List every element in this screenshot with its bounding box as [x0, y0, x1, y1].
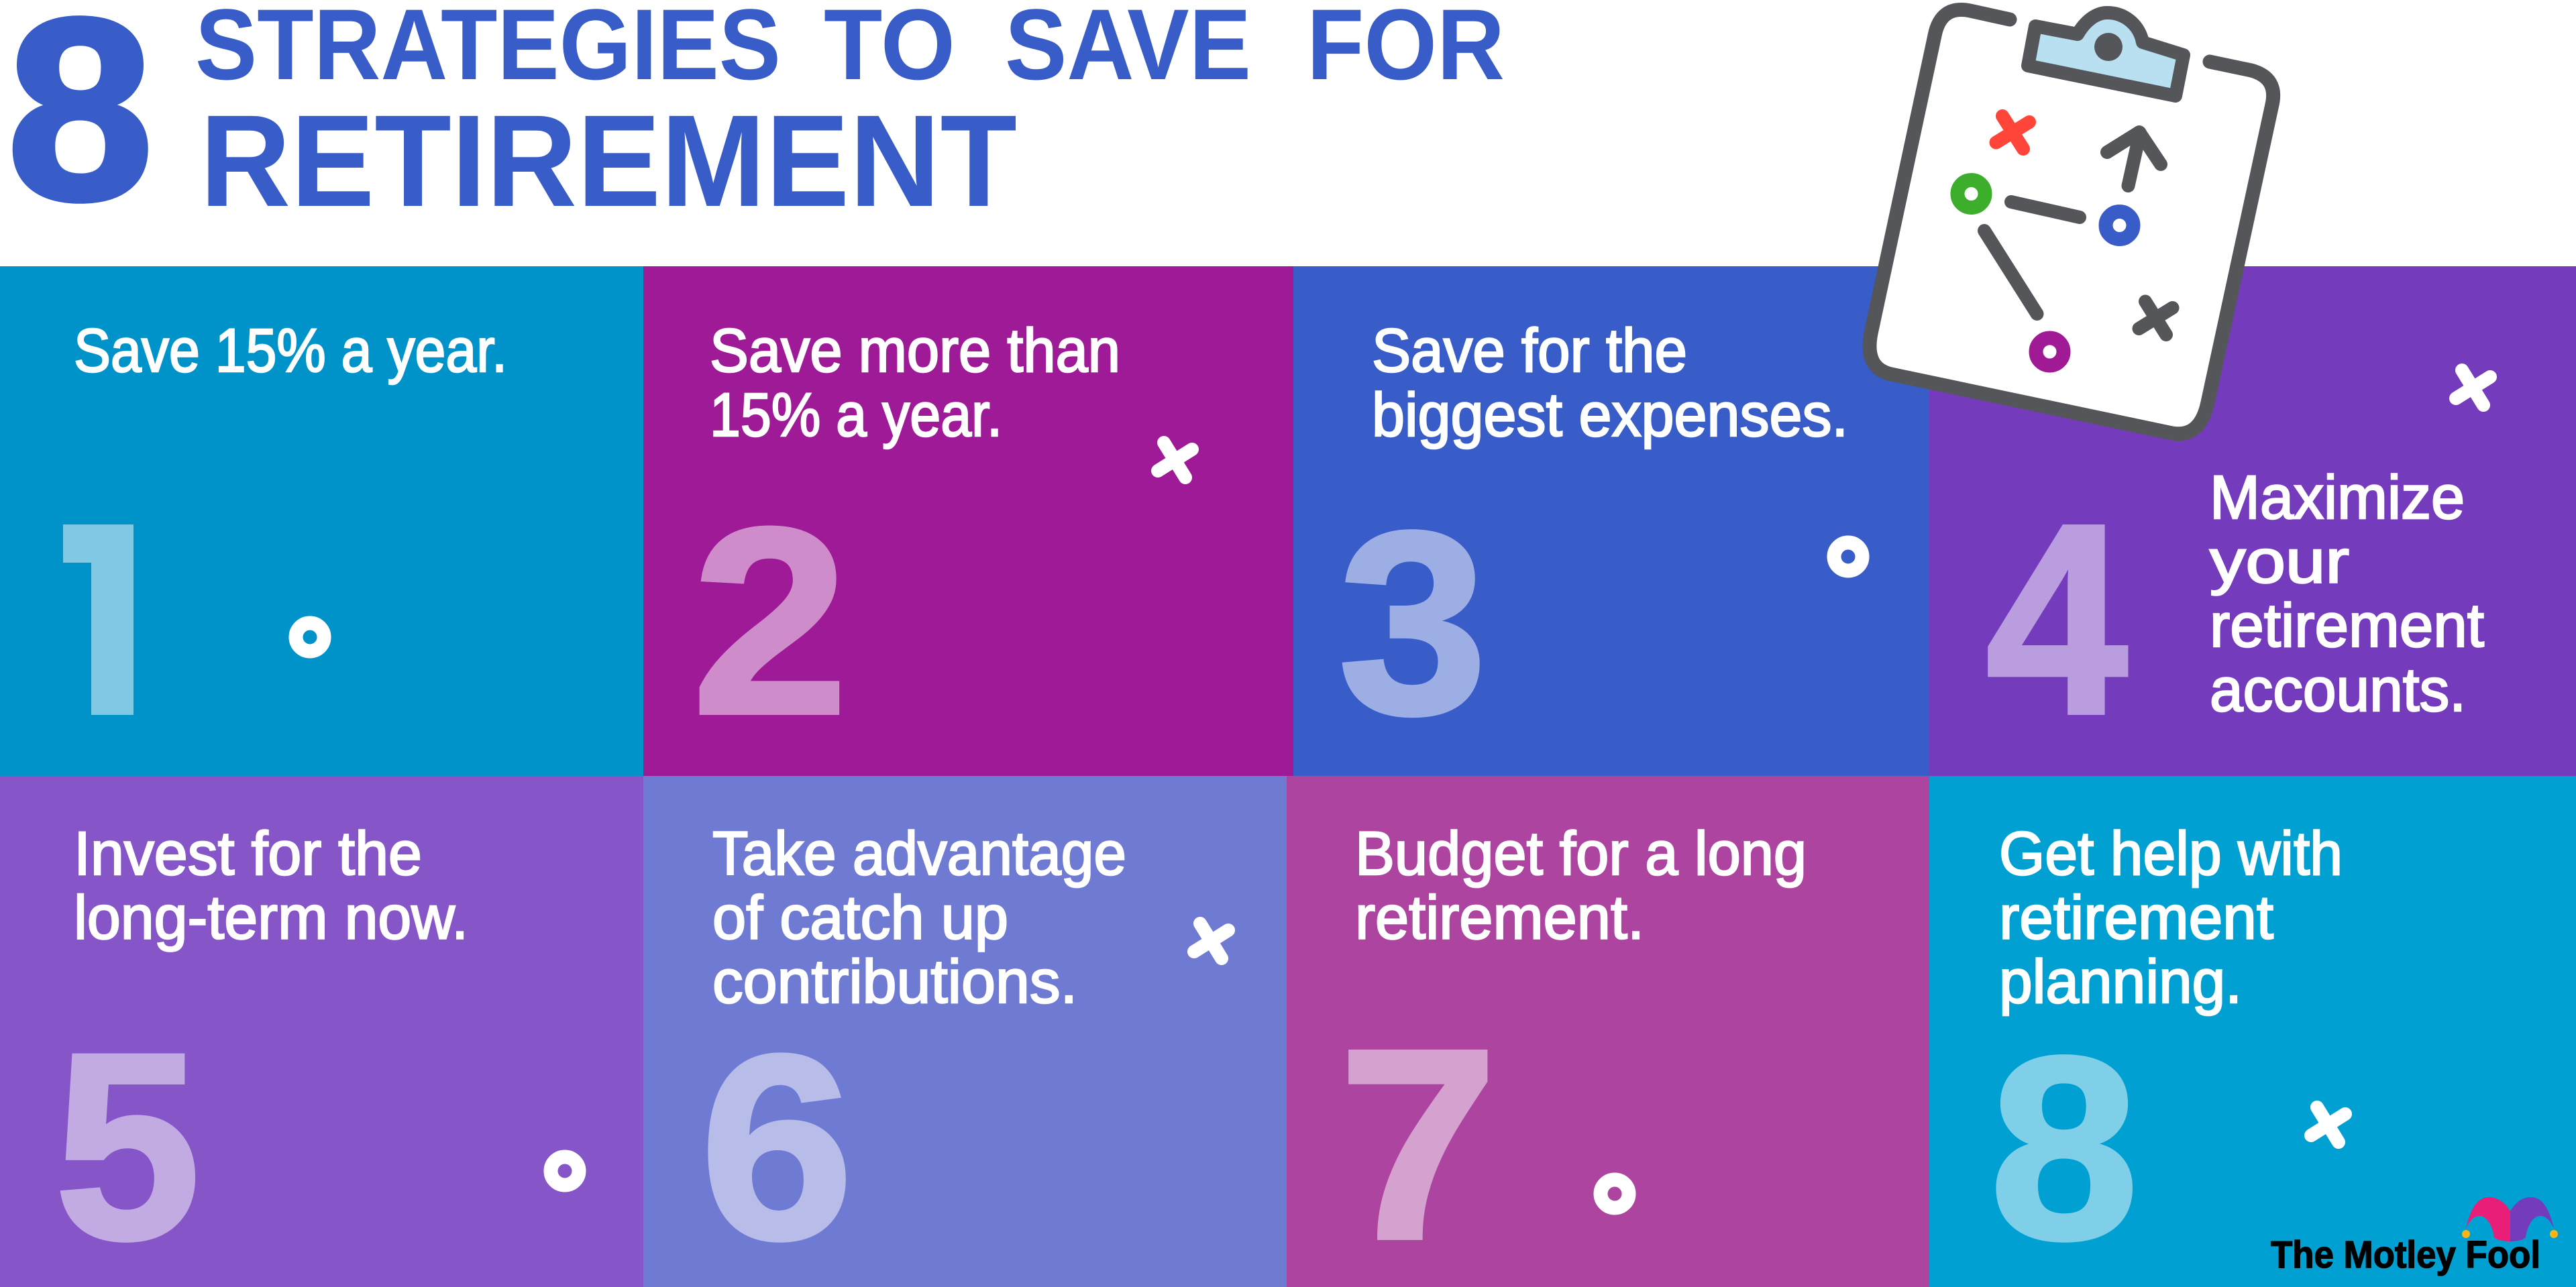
- number 1: [63, 524, 133, 715]
- panel 2: save more: Save more than: [710, 317, 1120, 385]
- panel 6: catch up contributions: of catch up: [712, 884, 1008, 952]
- icon: circle: [551, 1157, 579, 1185]
- title: [7, 0, 1505, 254]
- panel 1: save 15%: [0, 266, 643, 776]
- number 3: 3: [1338, 477, 1487, 769]
- heading line 2: RETIREMENT: [200, 88, 1017, 234]
- number 1: 1: [15, 465, 191, 773]
- panel 6: catch up contributions: [643, 776, 1287, 1287]
- panel 7: budget long retirement: Budget for a long: [1355, 820, 1807, 888]
- panel 4: maximize accounts: accounts.: [2210, 656, 2466, 724]
- panel 8: get help: [1929, 776, 2576, 1287]
- icon: circle: [1601, 1180, 1629, 1208]
- clipboard clip: [2028, 13, 2184, 96]
- panel 5: invest long-term: Invest for the: [74, 820, 422, 888]
- dark x: [2139, 302, 2172, 335]
- panel 7: budget long retirement: [1287, 776, 1929, 1287]
- heading line 1: [195, 0, 1505, 101]
- panel 4: maximize accounts: [1929, 266, 2576, 776]
- panel 4: maximize accounts: Maximize: [2210, 463, 2465, 532]
- red x: [1996, 116, 2029, 149]
- number 4: 4: [1986, 468, 2129, 771]
- icon: x mark: [1194, 924, 1228, 958]
- panel 3: biggest expenses: Save for the: [1372, 317, 1687, 385]
- jester hat: [2462, 1197, 2558, 1241]
- number 5: 5: [54, 998, 201, 1287]
- panel 2: save more: [643, 266, 1293, 776]
- panel 4: maximize accounts: retirement: [2210, 592, 2484, 660]
- blue circle: [2106, 212, 2133, 239]
- panel 1: save 15%: Save 15% a year.: [74, 317, 507, 385]
- panel 8: get help: retirement: [1999, 884, 2273, 952]
- panel 7: budget long retirement: retirement.: [1355, 884, 1644, 952]
- number 7: 7: [1338, 993, 1498, 1287]
- number 8: 8: [1990, 1002, 2139, 1287]
- number 2: 2: [692, 473, 849, 769]
- number 6: 6: [700, 1001, 854, 1287]
- panel 8: get help: Get help with: [1999, 820, 2343, 888]
- panel 6: catch up contributions: contributions.: [712, 948, 1077, 1016]
- panel 5: invest long-term: long-term now.: [74, 884, 468, 952]
- panel 3: biggest expenses: biggest expenses.: [1372, 381, 1848, 449]
- logo wordmark: The Motley Fool: [2271, 1233, 2540, 1276]
- icon: x mark: [2456, 370, 2490, 405]
- panel 6: catch up contributions: Take advantage: [712, 820, 1126, 888]
- panel 8: get help: planning.: [1999, 948, 2242, 1016]
- icon: x mark: [2311, 1107, 2345, 1142]
- purple circle: [2036, 338, 2063, 366]
- panel 3: biggest expenses: [1293, 266, 1929, 776]
- panel 5: invest long-term: [0, 776, 643, 1287]
- icon: clipboard: [1870, 10, 2273, 434]
- icon: circle: [296, 623, 324, 651]
- play lines and arrow: [1984, 132, 2161, 314]
- panel 2: save more: 15% a year.: [710, 381, 1002, 449]
- logo: The Motley Fool: [2271, 1197, 2558, 1276]
- icon: x mark: [1158, 443, 1192, 478]
- green circle: [1957, 180, 1985, 208]
- icon: circle: [1834, 543, 1862, 571]
- clipboard board: [1870, 10, 2273, 434]
- panel 4: maximize accounts: your: [2210, 527, 2349, 596]
